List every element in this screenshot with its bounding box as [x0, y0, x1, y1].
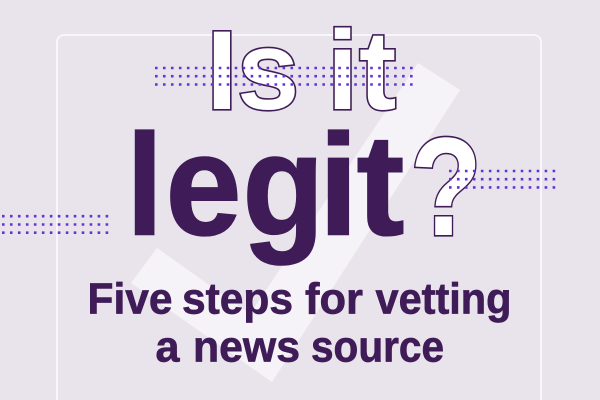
title: legit: [126, 104, 404, 266]
title: legit: e: [166, 104, 242, 266]
dot band: left of legit: [2, 216, 109, 233]
subtitle line 1: [88, 276, 512, 324]
title: question mark: ?: [410, 108, 482, 265]
title: Is it: Is it: [206, 8, 396, 133]
subtitle line 2: a: [156, 324, 180, 372]
subtitle: [88, 276, 512, 372]
title: legit: l: [126, 104, 163, 266]
dot band: right of question mark: [449, 171, 557, 187]
title: legit: t: [356, 104, 404, 266]
subtitle line 1: steps: [182, 276, 293, 324]
subtitle line 1: for: [305, 276, 363, 324]
dot band: behind Is it: [155, 68, 414, 84]
title: legit: i: [318, 104, 359, 266]
title: legit: g: [242, 104, 324, 266]
subtitle line 1: Five: [88, 276, 172, 324]
icon: large checkmark: [131, 63, 460, 382]
subtitle line 2: [156, 324, 444, 372]
white rounded frame: [57, 35, 541, 400]
subtitle line 1: vetting: [376, 276, 512, 324]
subtitle line 2: source: [311, 324, 444, 372]
subtitle line 2: news: [193, 324, 300, 372]
